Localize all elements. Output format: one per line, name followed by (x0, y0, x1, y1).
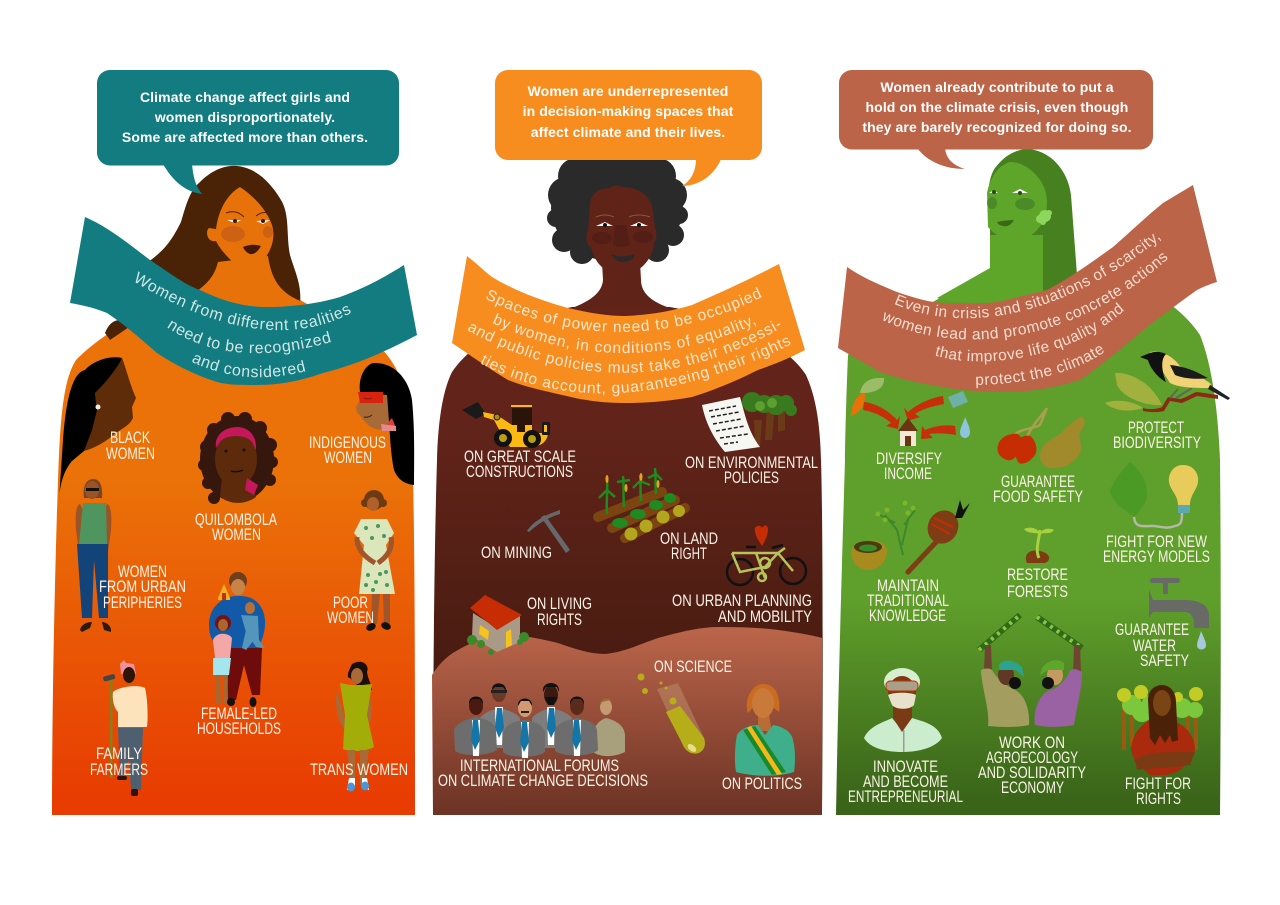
label: FARMERS (90, 760, 148, 779)
icon: test tube (638, 674, 705, 754)
speech bubble: Women already contribute to put a (880, 79, 1114, 95)
label: DIVERSIFY (876, 449, 942, 468)
label: RIGHT (671, 544, 707, 563)
label: FOOD SAFETY (993, 487, 1083, 506)
icon: pickaxe (527, 510, 570, 553)
icon: woman from urban peripheries (76, 479, 111, 632)
label: WOMEN (324, 448, 372, 467)
icon: indigenous woman profile (356, 363, 414, 485)
panel: women affected differently: and considered (192, 355, 306, 378)
label: PERIPHERIES (103, 593, 182, 612)
icon: policy document and trees (702, 392, 797, 452)
icon: poor woman (354, 490, 395, 632)
icon: bird on branch with leaves (1105, 352, 1230, 412)
label: AND SOLIDARITY (978, 763, 1086, 782)
label: WORK ON (999, 733, 1065, 752)
icon: yellow loader (462, 402, 550, 448)
banner text: Women from different realities (136, 271, 351, 330)
label: ON LIVING (527, 594, 592, 613)
label: QUILOMBOLA (195, 510, 277, 529)
label: GUARANTEE (1115, 620, 1189, 639)
label: RESTORE (1007, 565, 1068, 584)
label: FIGHT FOR (1125, 774, 1191, 793)
banner: orange ribbon (452, 256, 805, 403)
label: ENTREPRENEURIAL (848, 787, 963, 806)
icon: quilombola woman (198, 412, 278, 504)
label: AGROECOLOGY (986, 748, 1078, 767)
icon: strawberries and gourd (997, 408, 1085, 468)
banner: teal ribbon (70, 217, 417, 385)
icon: house (467, 595, 529, 655)
speech bubble: Some are affected more than others. (122, 129, 368, 145)
label: RIGHTS (1136, 789, 1181, 808)
body: brown silhouette (433, 307, 823, 815)
speech bubble: affect climate and their lives. (531, 124, 725, 140)
icon: people at international forums (454, 683, 625, 758)
label: CONSTRUCTIONS (466, 462, 573, 481)
body: green silhouette (836, 270, 1221, 815)
icon: trans woman (336, 662, 374, 792)
icon: faucet (1149, 578, 1209, 650)
panel: underrepresentation in decision-making: ties into account, guaranteeing their rights (481, 338, 790, 396)
label: BIODIVERSITY (1113, 433, 1201, 452)
speech bubble: women disproportionately. (154, 109, 335, 125)
label: INNOVATE (873, 757, 938, 776)
label: FORESTS (1007, 582, 1068, 601)
label: ON ENVIRONMENTAL (685, 453, 818, 472)
icon: crop beds (598, 468, 685, 540)
icon: woman politician with sash (735, 684, 795, 776)
body: orange silhouette (52, 287, 415, 815)
speech bubble (97, 70, 399, 194)
label: WOMEN (118, 562, 167, 581)
label: PROTECT (1128, 418, 1184, 437)
label: AND MOBILITY (718, 607, 812, 626)
label: POLICIES (724, 468, 779, 487)
label: ON LAND (660, 529, 718, 548)
label: ON URBAN PLANNING (672, 591, 812, 610)
label: WATER (1133, 636, 1176, 655)
icon: family farmer (103, 660, 148, 796)
label: POOR (333, 593, 368, 612)
icon: house with income arrows (851, 378, 970, 446)
panel: women's contribution: that improve life quality and (936, 302, 1124, 364)
banner text: Spaces of power need to be occupied (486, 287, 762, 332)
label: SAFETY (1140, 651, 1189, 670)
icon: leaf and lightbulb (1110, 462, 1198, 528)
speech bubble: they are barely recognized for doing so. (862, 119, 1132, 135)
panel: underrepresentation in decision-making: by women, in conditions of equality, (493, 313, 756, 354)
speech bubble: Climate change affect girls and (140, 89, 350, 105)
speech bubble: Women are underrepresented (528, 83, 728, 99)
icon: bicycle with heart (727, 525, 806, 585)
illustration: woman with afro (547, 154, 688, 308)
illustration: woman with long brown hair (105, 166, 312, 340)
icon: black woman profile (59, 357, 136, 500)
banner text: Even in crisis and situations of scarcity, (895, 234, 1161, 318)
illustration: green woman with long hair (937, 149, 1077, 303)
label: FIGHT FOR NEW (1106, 532, 1207, 551)
speech bubble: in decision-making spaces that (523, 103, 734, 119)
label: ON CLIMATE CHANGE DECISIONS (438, 771, 648, 790)
panel: women's contribution (836, 70, 1230, 815)
panel: women's contribution: protect the climate (976, 346, 1104, 388)
speech bubble: hold on the climate crisis, even though (866, 99, 1128, 115)
label: ON MINING (481, 543, 552, 562)
label: INCOME (884, 464, 932, 483)
icon: bowl, herbs and maraca (851, 500, 970, 572)
label: ON POLITICS (722, 774, 802, 793)
panel: women affected differently: need to be recognized (168, 320, 331, 354)
label: TRANS WOMEN (310, 760, 408, 779)
speech bubble (839, 70, 1153, 169)
label: KNOWLEDGE (869, 606, 946, 625)
label: RIGHTS (537, 610, 582, 629)
icon: two agroecology workers with garland (979, 615, 1082, 727)
icon: sprout (1024, 528, 1054, 563)
label: HOUSEHOLDS (197, 719, 281, 738)
label: FROM URBAN (99, 577, 186, 596)
label: AND BECOME (863, 772, 948, 791)
label: WOMEN (106, 444, 155, 463)
label: ON GREAT SCALE (464, 447, 576, 466)
banner: terracotta ribbon (838, 185, 1217, 392)
icon: scientist with mask (864, 668, 942, 752)
label: WOMEN (212, 525, 261, 544)
label: WOMEN (327, 608, 374, 627)
label: FEMALE-LED (201, 704, 277, 723)
label: ON SCIENCE (654, 657, 732, 676)
label: BLACK (110, 428, 150, 447)
label: ENERGY MODELS (1103, 547, 1210, 566)
panel: underrepresentation in decision-making: and public policies must take their necessi- (468, 320, 780, 373)
panel: women's contribution: women lead and promote concrete actions (884, 253, 1168, 340)
label: ECONOMY (1001, 778, 1064, 797)
label: FAMILY (96, 744, 142, 763)
label: INTERNATIONAL FORUMS (460, 756, 619, 775)
label: MAINTAIN (877, 576, 939, 595)
panel: underrepresentation in decision-making (432, 70, 823, 815)
icon: woman defending trees (1117, 685, 1203, 775)
hill: lighter lower area (432, 627, 822, 815)
label: GUARANTEE (1001, 472, 1075, 491)
icon: female-led household (209, 572, 265, 707)
label: TRADITIONAL (867, 591, 949, 610)
panel: women affected differently (52, 70, 417, 815)
label: INDIGENOUS (309, 433, 386, 452)
speech bubble (495, 70, 762, 186)
